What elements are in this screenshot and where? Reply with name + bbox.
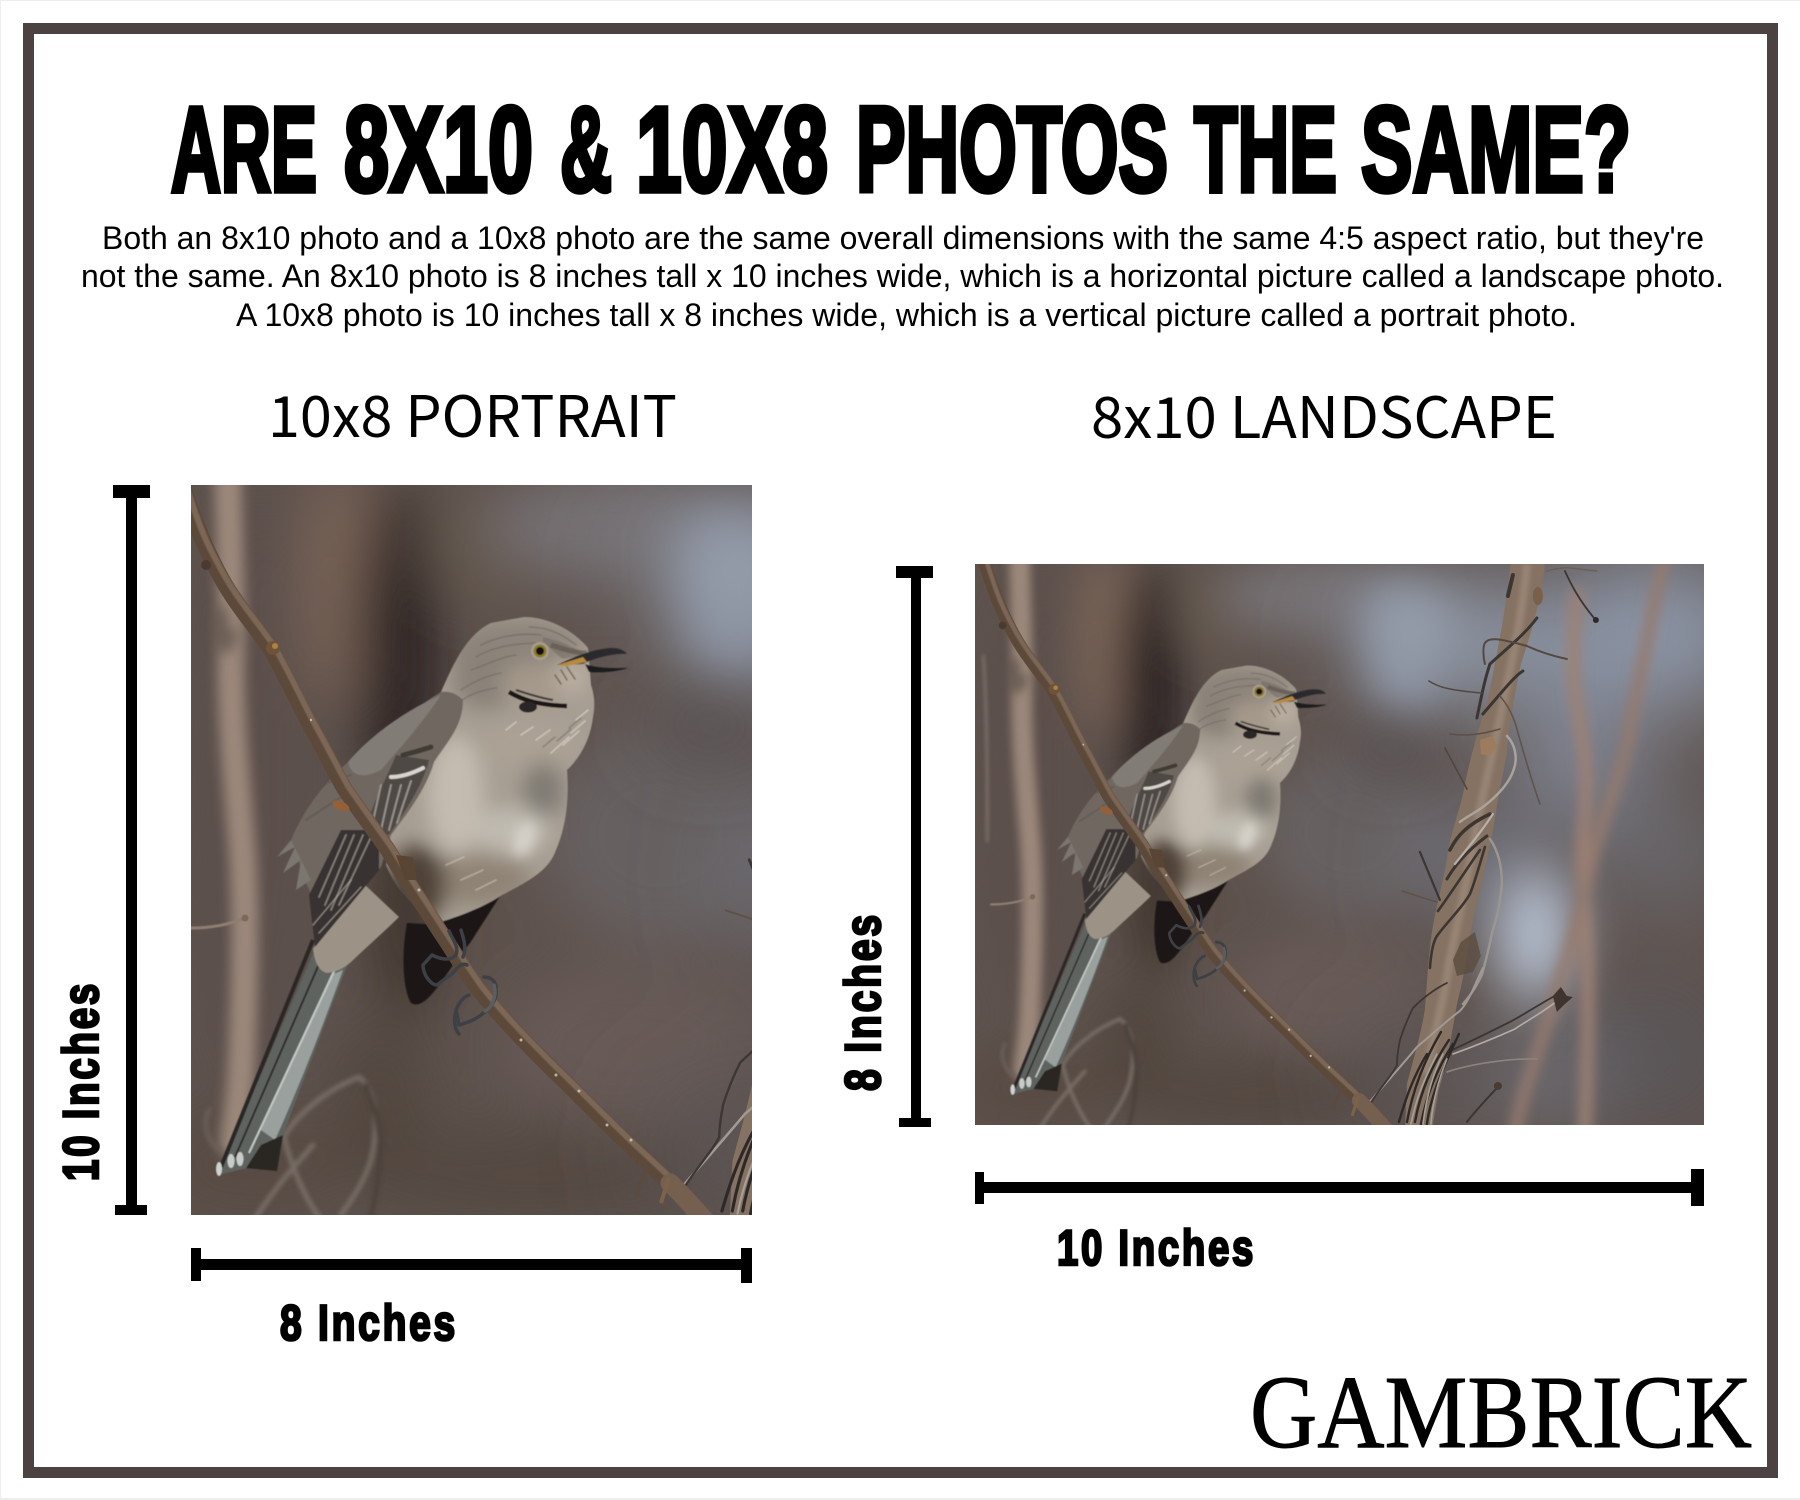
bird feet: [1169, 906, 1226, 986]
blurred background: [960, 549, 1765, 1148]
title: ARE: [171, 81, 317, 217]
heading: portrait: 10x8 PORTRAIT: [268, 372, 677, 454]
intro text: Both an 8x10 photo and a 10x8 photo are the same overall dimensions with the same 4:5 aspect ratio, but they're: [102, 220, 1704, 256]
bird feet: [423, 930, 496, 1034]
label: 10 inches portrait: 10 Inches: [53, 981, 109, 1181]
label: 10 inches landscape: 10 Inches: [1057, 1220, 1256, 1276]
bird: [1010, 665, 1327, 1095]
branch: [179, 475, 711, 1227]
label: 8 inches portrait: 8 Inches: [280, 1295, 458, 1351]
logo: GAMBRICK: [1250, 1355, 1752, 1470]
dimension bar: portrait height: [113, 485, 150, 1215]
dimension bar: landscape width: [975, 1169, 1704, 1206]
vine: [1368, 562, 1599, 1129]
title: PHOTOS: [856, 81, 1168, 217]
branch: [982, 556, 1391, 1134]
vine: [682, 482, 982, 1220]
intro text: not the same. An 8x10 photo is 8 inches tall x 10 inches wide, which is a horizontal picture called a landscape photo.: [81, 258, 1724, 294]
title: [171, 81, 1631, 217]
title: &: [560, 81, 612, 217]
photo: portrait mockingbird: [191, 485, 752, 1215]
title: 10X8: [636, 81, 828, 217]
dimension bar: portrait width: [191, 1248, 752, 1283]
title: THE: [1194, 81, 1337, 217]
intro text: [81, 220, 1724, 333]
heading: landscape: 8x10 LANDSCAPE: [1091, 373, 1557, 455]
label: 8 inches landscape: 8 Inches: [835, 912, 891, 1091]
dimension bar: landscape height: [896, 566, 933, 1127]
title: SAME?: [1361, 81, 1631, 217]
photo: landscape mockingbird: [975, 564, 1704, 1125]
title: 8X10: [344, 81, 533, 217]
blurred background: [151, 465, 1198, 1245]
bird: [216, 617, 628, 1176]
intro text: A 10x8 photo is 10 inches tall x 8 inches wide, which is a vertical picture called a portrait photo.: [236, 297, 1577, 333]
